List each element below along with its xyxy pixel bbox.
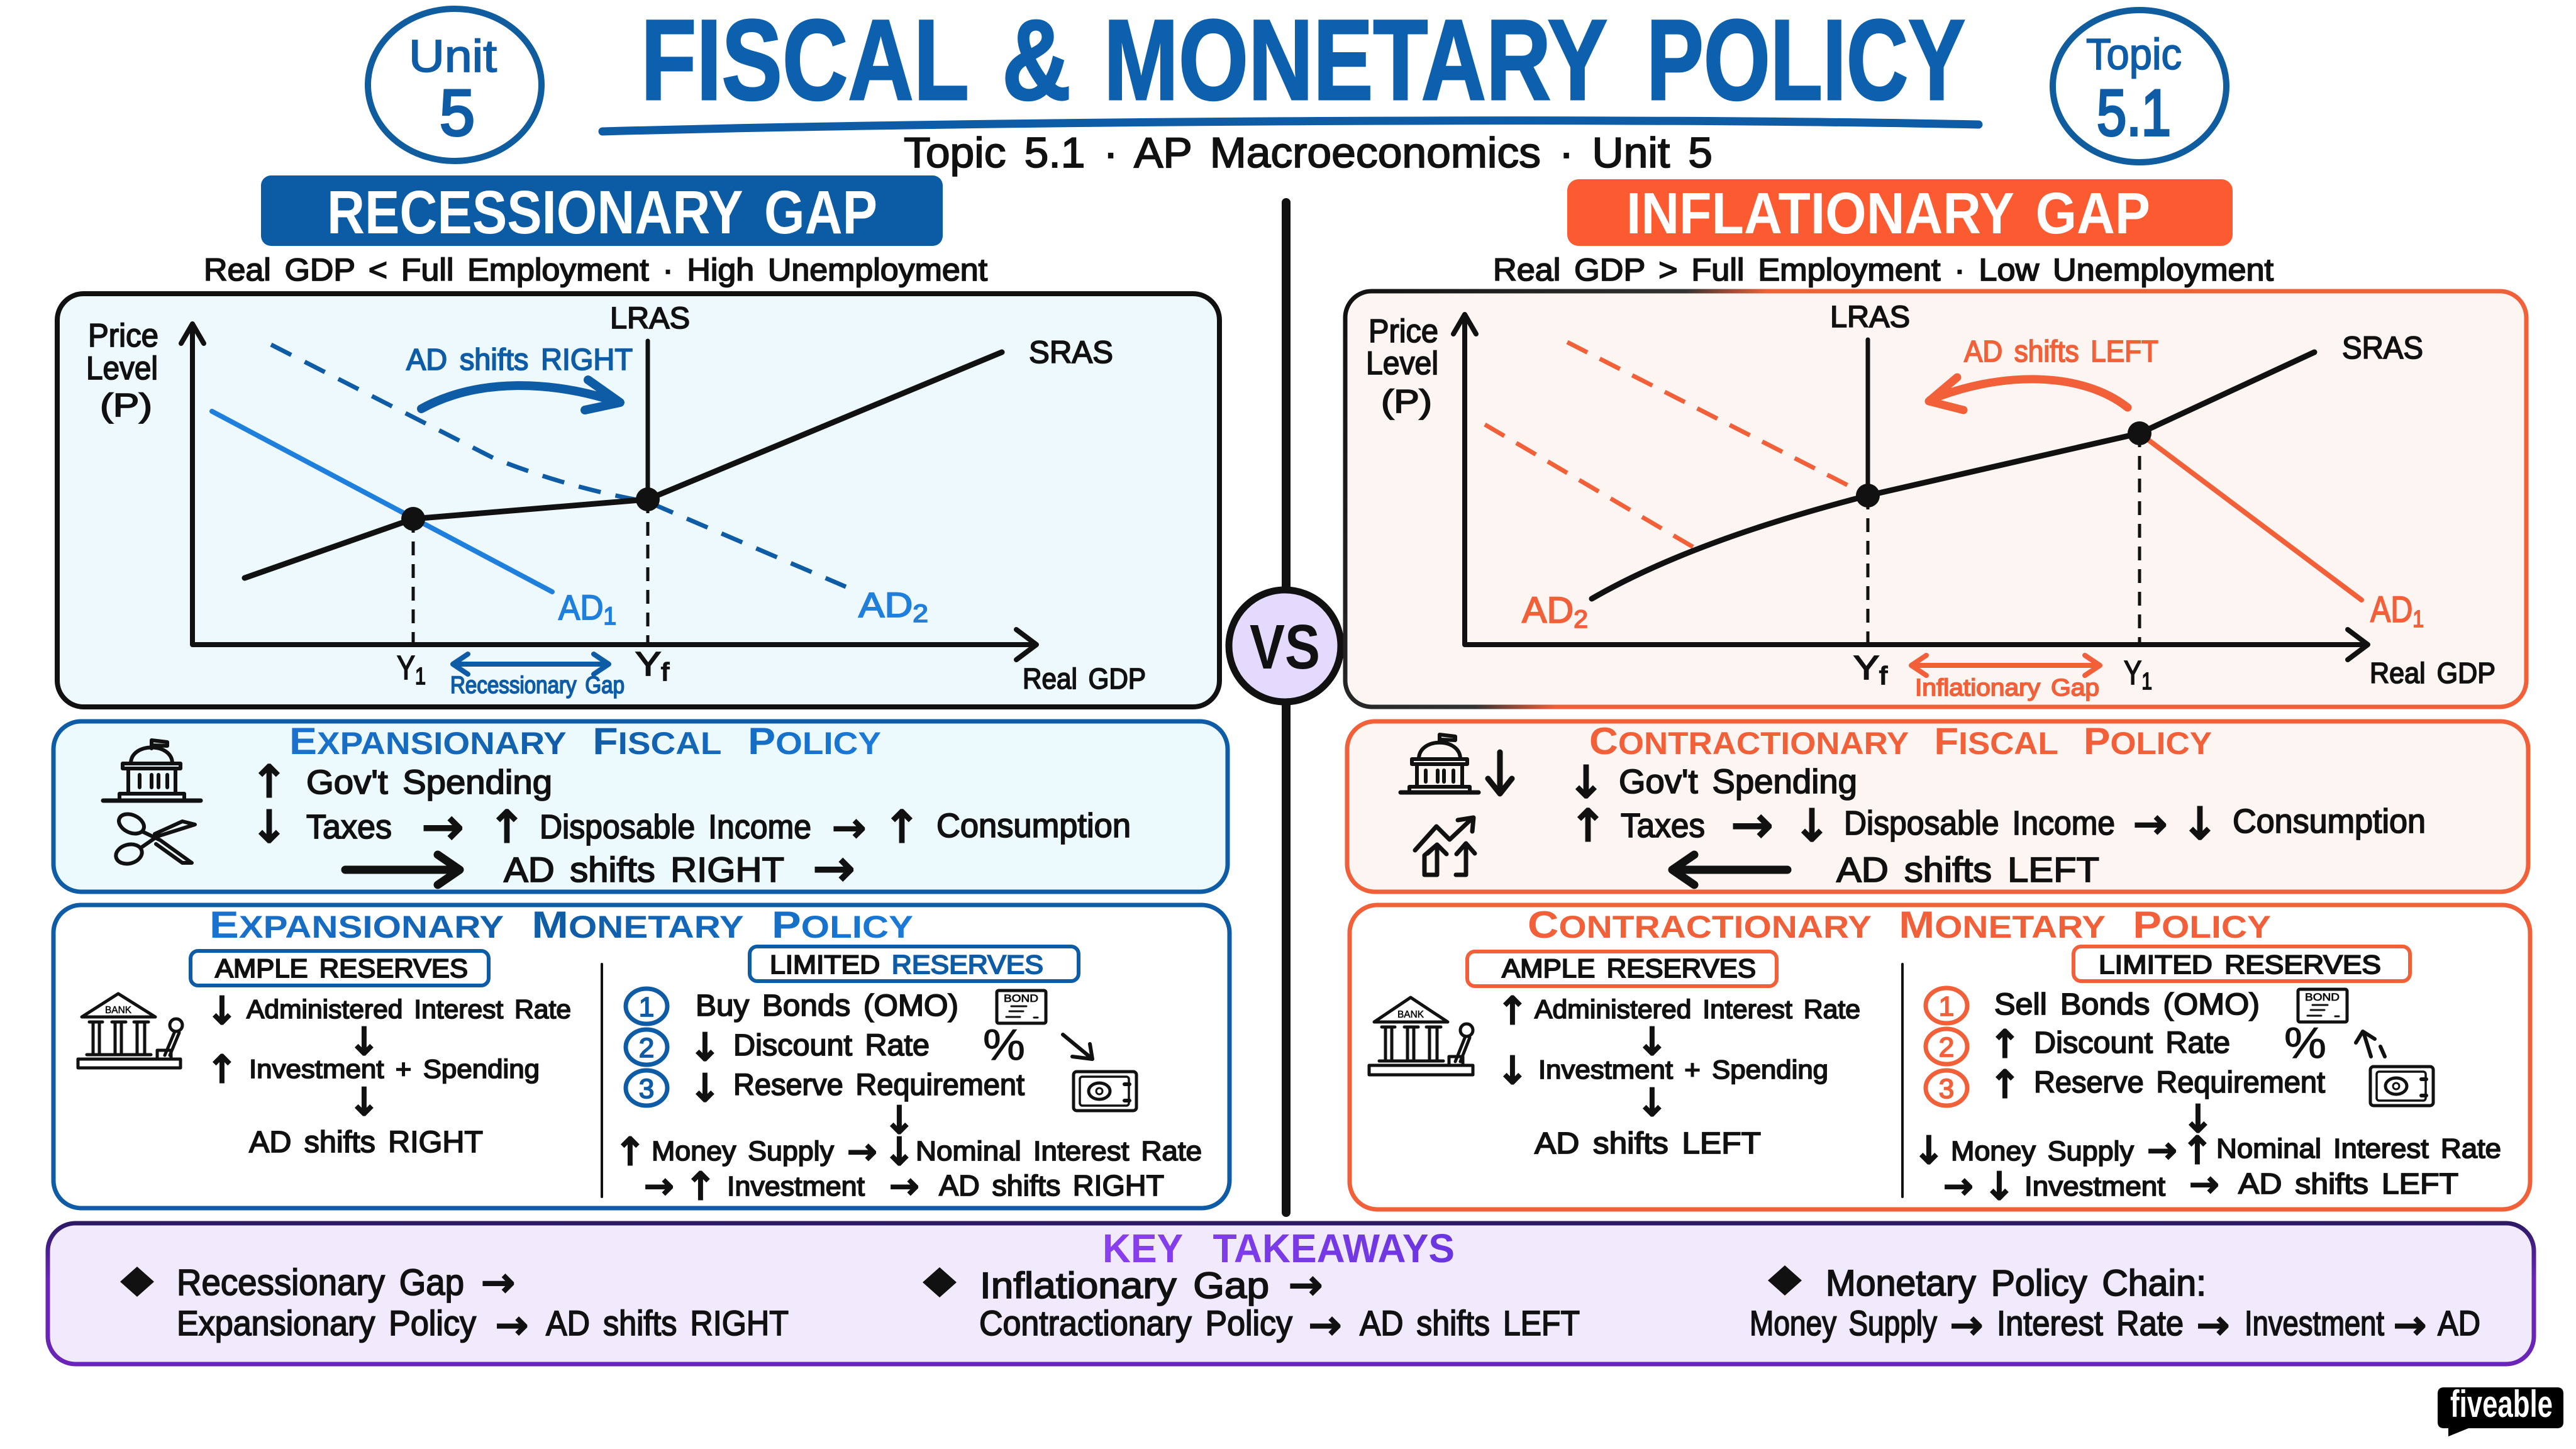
takeaway: monetary policy chain: →	[2394, 1302, 2426, 1348]
heading: inflationary gap: INFLATIONARY GAP	[1626, 180, 2150, 246]
takeaway: recessionary gap: →	[496, 1302, 528, 1348]
icon: scissors	[114, 810, 195, 867]
limited reserve steps: Reserve Requirement	[733, 1069, 1024, 1102]
AD1 curve	[212, 411, 552, 592]
Y1 label: 1	[415, 663, 426, 690]
limited reserves chain: Money Supply	[1951, 1136, 2134, 1167]
panel: inflationary gap chart	[1345, 291, 2526, 707]
heading: CONTRACTIONARY FISCAL POLICY	[1589, 720, 2212, 762]
limited reserves chain: ↓	[884, 1099, 915, 1143]
row: AD shifts right	[345, 839, 855, 897]
panel: recessionary gap chart	[57, 294, 1219, 707]
LRAS line	[645, 341, 650, 499]
label: limited reserves	[750, 947, 1079, 981]
takeaway: recessionary gap: →	[481, 1260, 515, 1306]
limited reserves chain: →	[2190, 1164, 2219, 1205]
limited reserves chain: ↓	[1913, 1129, 1945, 1173]
LRAS line	[1865, 340, 1870, 496]
takeaway: monetary policy chain: AD	[2438, 1303, 2480, 1343]
ample reserves chain: Investment + Spending	[249, 1054, 540, 1084]
AD shift label: AD shifts LEFT	[1964, 335, 2158, 369]
ample reserves chain: Administered Interest Rate	[247, 994, 571, 1024]
AD1 dashed lower curve	[1485, 425, 1699, 550]
limited reserve steps: ↓	[689, 1067, 721, 1111]
x axis label: Real GDP	[2370, 657, 2496, 689]
row: taxes chain: →	[2133, 801, 2167, 848]
SRAS line	[1592, 352, 2314, 599]
row: taxes chain: Disposable Income	[540, 808, 811, 846]
takeaway: monetary policy chain: →	[1950, 1302, 1983, 1348]
takeaway: recessionary gap: Recessionary Gap	[177, 1262, 464, 1303]
label: ample reserves	[1467, 952, 1777, 986]
limited reserve steps	[1926, 988, 2325, 1107]
limited reserves chain: Investment	[2024, 1171, 2165, 1202]
icon: bond certificate: BOND	[2305, 991, 2340, 1003]
takeaway: inflationary gap: AD shifts LEFT	[1360, 1303, 1580, 1343]
badge: Topic 5.1	[2053, 10, 2226, 162]
takeaway: recessionary gap: AD shifts RIGHT	[546, 1303, 789, 1343]
badge: Topic 5.1: Topic	[2086, 30, 2182, 79]
takeaway: monetary policy chain: Investment	[2245, 1303, 2384, 1343]
row: taxes chain	[1570, 796, 2426, 854]
axes	[1453, 314, 2368, 660]
icon: bond certificate	[997, 991, 1046, 1023]
takeaway: recessionary gap: Expansionary Policy	[177, 1303, 476, 1343]
limited reserves chain: Nominal Interest Rate	[2216, 1133, 2501, 1164]
dashed guides	[413, 499, 648, 645]
x axis label: Real GDP	[1023, 662, 1146, 695]
icon: percent: %	[2284, 1018, 2326, 1067]
label: ample reserves: AMPLE RESERVES	[1502, 953, 1756, 983]
row: taxes chain: Taxes	[1621, 807, 1705, 845]
ample reserves chain: AD shifts LEFT	[1535, 1127, 1761, 1160]
ample reserves chain: ↓	[1636, 1020, 1668, 1064]
AD shift arrow	[421, 380, 620, 410]
Yf label: Y	[635, 645, 658, 683]
heading: EXPANSIONARY FISCAL POLICY	[289, 720, 881, 762]
takeaway: inflationary gap: →	[1289, 1262, 1323, 1309]
divider	[601, 964, 603, 1197]
icon: bond certificate: BOND	[1004, 992, 1038, 1004]
limited reserve steps: Discount Rate	[2034, 1026, 2230, 1060]
y axis label: Price	[1368, 313, 1438, 350]
ample reserves chain: ↓	[1636, 1081, 1668, 1125]
limited reserve steps: ↑	[1989, 1063, 2021, 1107]
panel: contractionary fiscal policy	[1347, 720, 2528, 892]
panel: contractionary monetary policy	[1350, 904, 2530, 1209]
row: AD shifts right: →	[813, 839, 855, 897]
icon: central bank with lever	[1369, 997, 1473, 1075]
limited reserve steps: Reserve Requirement	[2034, 1066, 2325, 1099]
limited reserves chain: →	[2148, 1130, 2177, 1171]
equilibrium points	[1856, 421, 2151, 508]
row: taxes chain: ↑	[1570, 800, 1606, 852]
inflationary gap label: Inflationary Gap	[1915, 675, 2099, 701]
VS badge	[1229, 590, 1341, 702]
row: AD shifts left: AD shifts LEFT	[1836, 850, 2099, 889]
icon: capitol	[103, 740, 201, 801]
limited reserve steps: ↓	[689, 1026, 721, 1070]
heading: recessionary gap: RECESSIONARY GAP	[327, 178, 877, 247]
limited reserve steps: 1	[1939, 991, 1954, 1022]
ample reserves chain	[1497, 989, 1860, 1160]
panel: key takeaways	[48, 1223, 2534, 1364]
label: ample reserves	[191, 951, 489, 985]
divider	[1901, 964, 1904, 1197]
row: gov't spending: ↓	[1568, 757, 1604, 808]
row: taxes chain	[251, 797, 1131, 856]
panel: expansionary fiscal policy	[53, 720, 1228, 897]
inflationary gap arrow	[1911, 655, 2100, 675]
AD2 label: AD	[1522, 590, 1573, 631]
Yf label: Y	[1853, 649, 1876, 687]
icon: central bank with lever: BANK	[105, 1005, 131, 1016]
takeaway: monetary policy chain: Money Supply	[1750, 1303, 1937, 1343]
ample reserves chain: Administered Interest Rate	[1535, 994, 1860, 1024]
ample reserves chain: ↑	[1497, 989, 1528, 1033]
title	[641, 0, 1965, 124]
ample reserves chain: ↓	[348, 1080, 380, 1124]
equilibrium points	[401, 487, 660, 531]
AD2 label: 2	[913, 600, 928, 628]
row: taxes chain: →	[421, 797, 464, 856]
y axis label: Level	[86, 350, 158, 387]
icon: central bank with lever: BANK	[1397, 1009, 1424, 1020]
heading: KEY TAKEAWAYS	[1102, 1226, 1455, 1271]
label: ample reserves: AMPLE RESERVES	[215, 953, 468, 983]
badge: Unit 5: Unit	[409, 31, 497, 82]
takeaway: inflationary gap	[923, 1262, 1580, 1348]
AD2 dashed curve	[271, 345, 846, 587]
ample reserves chain	[206, 989, 571, 1159]
icon: central bank with lever	[78, 994, 182, 1068]
heading: CONTRACTIONARY MONETARY POLICY	[1528, 904, 2271, 946]
limited reserve steps: Buy Bonds (OMO)	[696, 989, 958, 1023]
limited reserve steps: 1	[639, 992, 654, 1023]
limited reserves chain: ↑	[2182, 1129, 2213, 1173]
icon: safe	[1074, 1072, 1136, 1111]
recessionary gap description: Real GDP < Full Employment · High Unemployment	[204, 252, 987, 287]
limited reserve steps: ↑	[1989, 1023, 2021, 1067]
takeaway: monetary policy chain: Interest Rate	[1997, 1303, 2184, 1343]
takeaway: inflationary gap: →	[1309, 1302, 1341, 1348]
row: taxes chain: Taxes	[306, 808, 392, 846]
SRAS line	[245, 352, 1002, 578]
y axis label: (P)	[1381, 384, 1432, 420]
limited reserves chain: →	[645, 1166, 674, 1207]
limited reserve steps: 2	[1939, 1032, 1954, 1063]
limited reserves chain: →	[1944, 1166, 1973, 1207]
icon: rising tax chart	[1415, 818, 1475, 875]
limited reserves chain	[614, 1099, 1202, 1209]
ample reserves chain: ↓	[206, 989, 238, 1033]
heading: EXPANSIONARY MONETARY POLICY	[209, 904, 913, 946]
AD1 label: 1	[2412, 606, 2424, 633]
dashed guides	[1868, 433, 2140, 645]
ample reserves chain: ↓	[348, 1020, 380, 1064]
limited reserve steps: 2	[639, 1033, 654, 1063]
Y1 label: Y	[397, 649, 419, 687]
badge: Unit 5	[368, 9, 541, 161]
label: limited reserves: LIMITED RESERVES	[2099, 950, 2381, 979]
icon: safe	[2370, 1067, 2433, 1106]
row: taxes chain: →	[1731, 796, 1774, 854]
row: AD shifts right: AD shifts RIGHT	[504, 850, 784, 889]
y axis label	[86, 318, 158, 424]
badge: Topic 5.1: 5.1	[2097, 77, 2171, 150]
badge: Unit 5: 5	[440, 77, 475, 150]
row: taxes chain: Consumption	[936, 807, 1131, 845]
SRAS label: SRAS	[1029, 335, 1113, 370]
row: AD shifts left	[1672, 850, 2099, 889]
Y1 label: Y	[2124, 654, 2146, 692]
row: taxes chain: →	[832, 805, 866, 852]
row: taxes chain: Disposable Income	[1844, 804, 2115, 842]
limited reserves chain: AD shifts LEFT	[2238, 1167, 2458, 1200]
limited reserves chain: ↓	[884, 1130, 915, 1174]
row: taxes chain: ↑	[489, 801, 525, 853]
takeaway: inflationary gap: Contractionary Policy	[979, 1303, 1292, 1343]
icon: bond certificate	[2298, 989, 2347, 1022]
recessionary gap arrow	[453, 654, 609, 674]
row: taxes chain: ↓	[1794, 800, 1830, 852]
recessionary gap label: Recessionary Gap	[450, 672, 625, 699]
axes	[181, 324, 1036, 660]
takeaway: monetary policy chain	[1750, 1263, 2480, 1348]
limited reserves chain: →	[890, 1166, 919, 1207]
subtitle: Topic 5.1 · AP Macroeconomics · Unit 5	[904, 129, 1713, 177]
icon: up-left arrows	[2356, 1031, 2385, 1057]
icon: down-right arrow	[1063, 1035, 1092, 1059]
limited reserves chain: ↓	[2182, 1097, 2214, 1141]
takeaway: monetary policy chain: Monetary Policy Chain:	[1826, 1263, 2206, 1304]
AD shift arrow	[1929, 377, 2128, 410]
LRAS label: LRAS	[1830, 301, 1910, 334]
row: gov't spending	[251, 756, 552, 808]
title underline	[602, 121, 1979, 131]
AD1 label: AD	[558, 587, 608, 627]
limited reserves chain	[1913, 1097, 2501, 1209]
panel: expansionary monetary policy	[53, 904, 1230, 1209]
takeaway: recessionary gap	[120, 1260, 789, 1348]
label: limited reserves: LIMITED RESERVES	[770, 950, 1043, 979]
limited reserves chain: AD shifts RIGHT	[939, 1169, 1164, 1202]
limited reserve steps: Sell Bonds (OMO)	[1994, 988, 2260, 1021]
limited reserves chain: ↓	[1984, 1165, 2015, 1209]
Yf label: f	[1879, 662, 1888, 690]
Y1 label: 1	[2141, 669, 2152, 695]
limited reserves chain: Investment	[727, 1171, 865, 1202]
center divider	[1282, 198, 1291, 1217]
LRAS label: LRAS	[610, 302, 690, 335]
Yf label: f	[661, 658, 670, 686]
y axis label: (P)	[100, 387, 152, 424]
takeaway: inflationary gap: Inflationary Gap	[980, 1265, 1269, 1306]
row: gov't spending: ↑	[251, 756, 287, 808]
limited reserves chain: ↑	[685, 1165, 716, 1209]
label: limited reserves	[2074, 947, 2410, 981]
limited reserve steps: 3	[639, 1074, 654, 1104]
ample reserves chain: Investment + Spending	[1538, 1055, 1828, 1084]
limited reserves chain: →	[848, 1131, 877, 1172]
limited reserve steps: 3	[1939, 1074, 1954, 1104]
limited reserves chain: ↑	[614, 1130, 646, 1174]
y axis label	[1366, 313, 1438, 420]
AD shift label: AD shifts RIGHT	[406, 343, 633, 377]
fiveable logo	[2438, 1383, 2563, 1436]
AD2 label: 2	[1574, 606, 1588, 633]
AD1 curve	[2140, 433, 2362, 600]
AD1 label: AD	[2370, 589, 2421, 630]
AD2 label: AD	[858, 585, 908, 625]
limited reserves chain: Money Supply	[652, 1136, 834, 1167]
AD1 label: 1	[604, 602, 616, 630]
row: taxes chain: ↓	[251, 801, 287, 853]
VS badge: VS	[1250, 612, 1320, 682]
row: gov't spending	[1568, 757, 1857, 808]
icon: capitol with down arrow	[1401, 735, 1512, 794]
inflationary gap description: Real GDP > Full Employment · Low Unemployment	[1493, 252, 2273, 287]
takeaway: monetary policy chain: →	[2197, 1302, 2229, 1348]
limited reserve steps: Discount Rate	[733, 1029, 930, 1062]
row: taxes chain: Consumption	[2233, 802, 2426, 840]
row: gov't spending: Gov't Spending	[306, 763, 552, 801]
ample reserves chain: ↓	[1497, 1049, 1528, 1093]
row: taxes chain: ↓	[2182, 798, 2218, 850]
ample reserves chain: ↑	[206, 1048, 238, 1092]
row: taxes chain: ↑	[884, 801, 920, 853]
limited reserve steps	[626, 989, 1024, 1111]
SRAS label: SRAS	[2342, 330, 2423, 365]
y axis label: Price	[88, 318, 158, 354]
y axis label: Level	[1366, 345, 1438, 382]
limited reserves chain: Nominal Interest Rate	[916, 1136, 1202, 1167]
row: gov't spending: Gov't Spending	[1619, 763, 1857, 801]
icon: percent: %	[983, 1020, 1025, 1069]
AD2 dashed upper curve	[1567, 342, 1848, 486]
ample reserves chain: AD shifts RIGHT	[249, 1126, 483, 1159]
